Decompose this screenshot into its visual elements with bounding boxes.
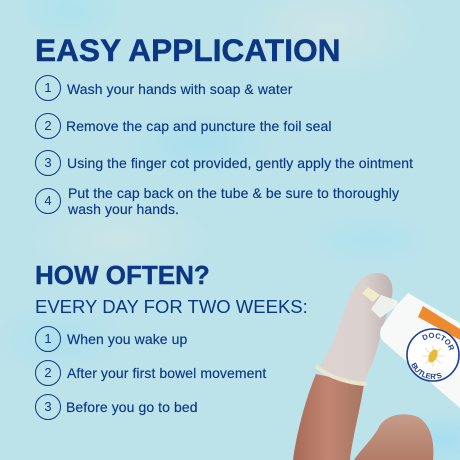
step 4: 4 xyxy=(44,193,52,208)
step 4 xyxy=(35,185,399,218)
tube logo: DOCTOR xyxy=(422,332,454,351)
step 3 xyxy=(35,150,413,176)
item 2: 2 xyxy=(44,365,52,380)
step 4: wash your hands. xyxy=(68,201,179,217)
item 1: When you wake up xyxy=(67,331,187,347)
cot ring xyxy=(317,367,365,384)
item 1: 1 xyxy=(44,331,52,346)
item 3 xyxy=(35,394,198,420)
heading: how often: HOW OFTEN? xyxy=(35,260,210,290)
finger xyxy=(293,374,364,460)
step 2: Remove the cap and puncture the foil seal xyxy=(66,118,332,134)
step 3: Using the finger cot provided, gently apply the ointment xyxy=(67,155,413,171)
title: easy application: EASY APPLICATION xyxy=(35,32,341,68)
tube logo: BUTLER'S xyxy=(411,362,442,379)
subheading: EVERY DAY FOR TWO WEEKS: xyxy=(35,296,308,317)
step 1: Wash your hands with soap & water xyxy=(67,81,292,97)
item 1 xyxy=(35,326,187,352)
step 3: 3 xyxy=(44,155,52,170)
thumb xyxy=(354,414,433,460)
orange stripe xyxy=(418,306,460,340)
item 2: After your first bowel movement xyxy=(67,365,266,381)
ointment tip xyxy=(362,287,380,302)
tube logo xyxy=(406,328,460,382)
step 1 xyxy=(35,75,292,101)
item 2 xyxy=(35,360,266,386)
step 4: Put the cap back on the tube & be sure to thoroughly xyxy=(68,185,399,201)
item 3: Before you go to bed xyxy=(66,399,198,415)
step 1: 1 xyxy=(44,80,52,95)
tube body xyxy=(380,293,460,408)
photo: finger with cot and ointment tube xyxy=(293,273,460,460)
finger cot xyxy=(320,273,392,381)
item 3: 3 xyxy=(44,399,52,414)
nozzle xyxy=(371,295,398,318)
step 2 xyxy=(35,113,332,139)
step 2: 2 xyxy=(44,118,52,133)
